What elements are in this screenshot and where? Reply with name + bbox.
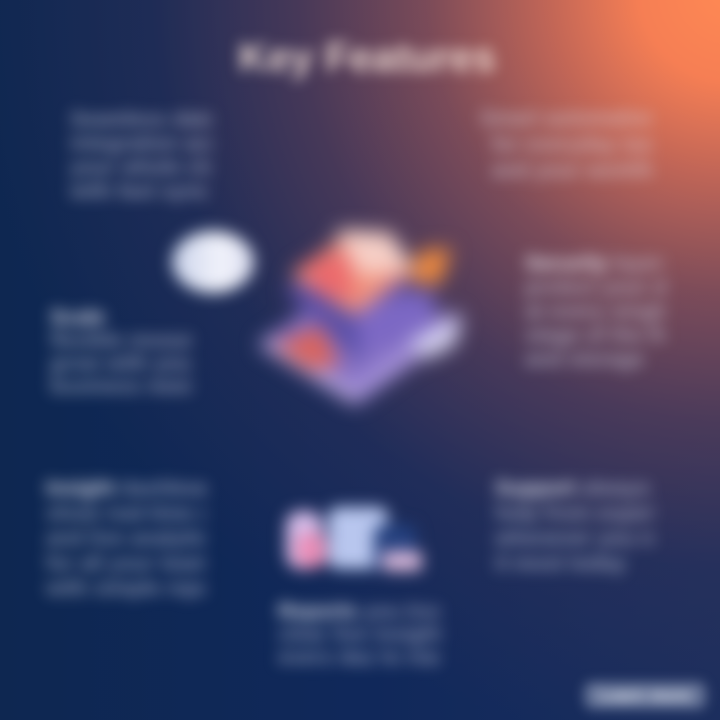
text block: top right xyxy=(477,106,656,184)
text block: right middle: and storage xyxy=(525,348,644,371)
text block: bottom left xyxy=(38,472,212,604)
text block: top left: Seamless data xyxy=(70,108,212,131)
icon: bottom centre charts xyxy=(273,495,434,584)
button: bottom right logo: Learn more xyxy=(599,686,691,705)
text block: left middle: Scale xyxy=(50,306,105,329)
text block: bottom right xyxy=(488,472,658,579)
bottom layer xyxy=(258,270,462,405)
text block: bottom right: it most today xyxy=(495,552,626,575)
text block: top left: with fast sync xyxy=(70,180,209,203)
illustration: isometric layered cube xyxy=(250,214,474,416)
text block: right middle xyxy=(519,248,670,376)
title: Key Features xyxy=(238,34,496,80)
icon: cloud xyxy=(160,218,266,306)
middle layer xyxy=(285,250,440,360)
top layer xyxy=(290,228,452,315)
button: bottom right logo xyxy=(584,682,706,709)
text block: bottom centre xyxy=(270,594,446,672)
text block: left middle xyxy=(42,301,197,401)
text block: top left xyxy=(64,105,216,207)
